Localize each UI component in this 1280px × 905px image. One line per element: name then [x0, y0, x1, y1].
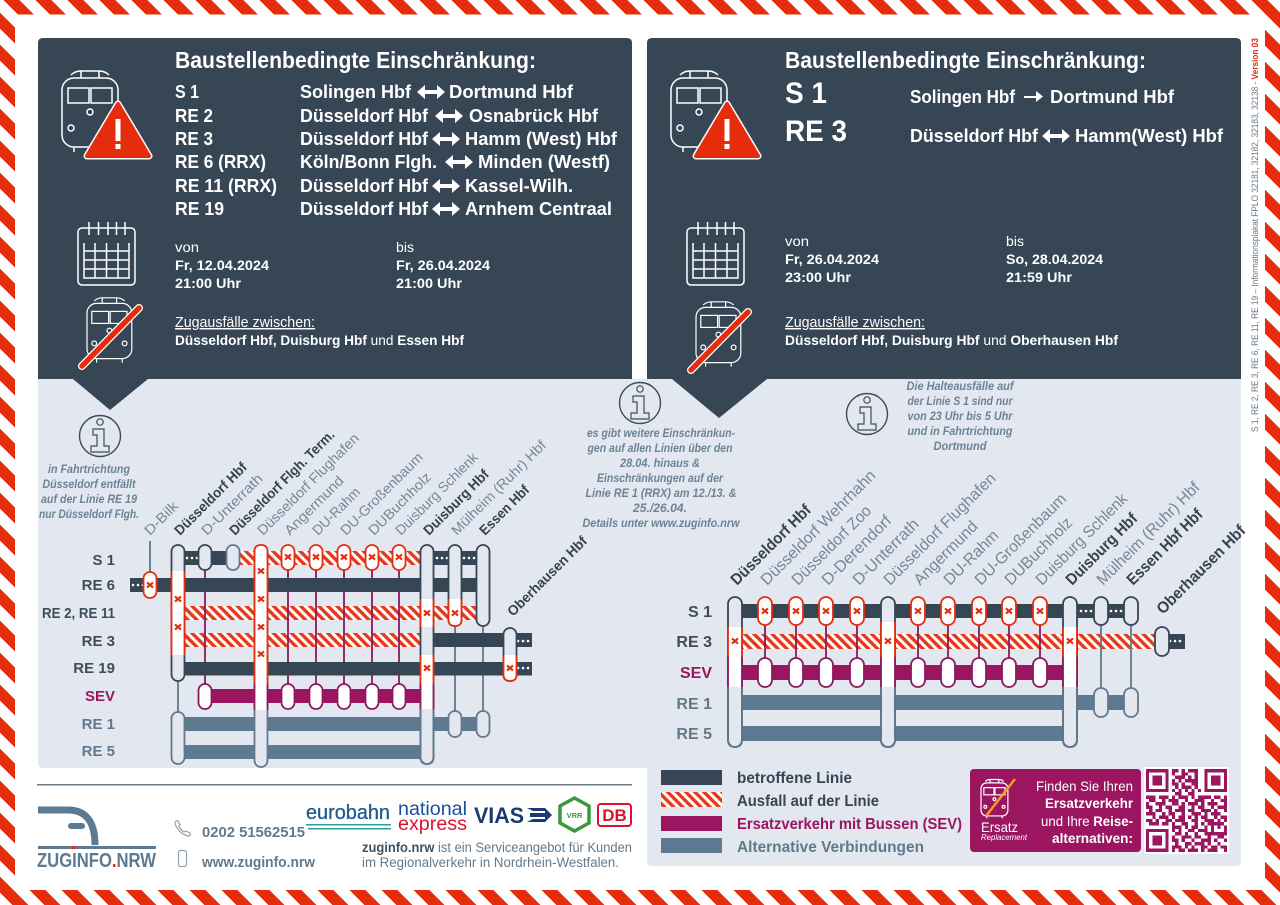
- cancellations: left panel: [175, 315, 464, 348]
- logo: DB: DB: [602, 806, 627, 825]
- row labels: RE 3: [82, 633, 115, 650]
- affected lines table: Düsseldorf Hbf: [300, 199, 429, 219]
- affected lines table: Hamm(West) Hbf: [1075, 126, 1224, 146]
- info note: left: in Fahrtrichtung: [48, 462, 131, 476]
- icon: calendar: [687, 222, 744, 285]
- callout: replacement finder: Replacement: [981, 833, 1028, 842]
- icon: train warning: [62, 71, 149, 156]
- logo: VIAS: VIAS: [474, 803, 524, 828]
- info note: left: auf der Linie RE 19: [41, 492, 137, 506]
- logo: zuginfo.nrw: [37, 810, 156, 872]
- row labels: SEV: [85, 688, 115, 705]
- dates: right panel: So, 28.04.2024: [1006, 251, 1103, 267]
- affected lines table: Solingen Hbf: [910, 87, 1016, 107]
- cancellations: right panel: Zugausfälle zwischen:: [785, 315, 925, 331]
- icon: cancelled train: [691, 302, 748, 370]
- row labels: RE 5: [676, 726, 712, 743]
- dates: right panel: [785, 233, 1103, 285]
- row labels: RE 6: [82, 577, 115, 594]
- info note: middle: es gibt weitere Einschränkun-: [587, 426, 735, 440]
- panel: left dark header: [38, 38, 632, 410]
- station labels: [141, 426, 590, 619]
- dates: left panel: 21:00 Uhr: [396, 275, 463, 291]
- callout: replacement finder: und Ihre Reise-: [1041, 813, 1133, 829]
- legend: [661, 770, 962, 856]
- info note: right: Dortmund: [934, 439, 987, 453]
- affected lines table: Dortmund Hbf: [1050, 87, 1175, 107]
- station labels: D-Unterrath: [198, 470, 266, 538]
- track dots: [1080, 610, 1181, 642]
- affected lines table: RE 2: [175, 106, 213, 126]
- row labels: S 1: [688, 604, 712, 621]
- affected lines table: RE 19: [175, 199, 224, 219]
- icon: cancelled train: [82, 298, 139, 366]
- affected lines table: Arnhem Centraal: [465, 199, 612, 219]
- logo: national express: national: [398, 799, 467, 820]
- station labels: Oberhausen Hbf: [1154, 522, 1250, 618]
- affected lines table: [175, 82, 618, 219]
- cancelled line segments: [184, 551, 478, 647]
- station labels: Düsseldorf Flughafen: [254, 430, 362, 538]
- affected lines table: Osnabrück Hbf: [469, 106, 599, 126]
- footer service note: im Regionalverkehr in Nordrhein-Westfalen.: [362, 855, 619, 870]
- info note: left: nur Düsseldorf Flgh.: [39, 507, 139, 521]
- light background panel: [38, 379, 1241, 866]
- station labels: Düsseldorf Wehrhahn: [758, 467, 879, 589]
- alternative connections bars: [742, 695, 1126, 741]
- dates: right panel: 23:00 Uhr: [785, 269, 852, 285]
- legend: replacement buses: Ersatzverkehr mit Bussen (SEV): [737, 816, 962, 833]
- legend: alternatives: [661, 838, 924, 856]
- footer service note: zuginfo.nrw ist ein Serviceangebot für Kunden: [362, 840, 632, 855]
- station labels: Düsseldorf Hbf: [171, 459, 250, 538]
- logo: DB: [598, 804, 631, 826]
- affected lines table: RE 11 (RRX): [175, 176, 277, 196]
- info note: middle: [582, 382, 740, 530]
- affected lines table: Köln/Bonn Flgh.: [300, 152, 437, 172]
- info note: right: [846, 379, 1014, 453]
- station labels: [728, 467, 1250, 618]
- affected lines table: Düsseldorf Hbf: [300, 106, 429, 126]
- info note: middle: Einschränkungen auf der: [597, 471, 724, 485]
- diagram: right line chart: [676, 467, 1250, 747]
- station pills: [728, 597, 1169, 747]
- cancelled line segment: [742, 634, 1155, 649]
- dates: right panel: Fr, 26.04.2024: [785, 251, 879, 267]
- QR code: [1144, 767, 1229, 854]
- station labels: Duisburg Hbf: [1063, 510, 1142, 589]
- dates: left panel: 21:00 Uhr: [175, 275, 242, 291]
- vertical imprint: S 1, RE 2, RE 3, RE 6, RE 11, RE 19 – Informationsplakat FPLO 32181, 32182, 32183, 32138 - Version 03: [1250, 38, 1260, 432]
- station labels: D-Bilk: [141, 497, 182, 538]
- info note: left: Düsseldorf entfällt: [42, 477, 136, 491]
- logo: eurobahn: eurobahn: [306, 802, 390, 824]
- dates: right panel: 21:59 Uhr: [1006, 269, 1073, 285]
- logo: VIAS: [474, 803, 552, 828]
- callout: replacement finder: alternativen:: [1052, 830, 1133, 846]
- info note: right: Die Halteausfälle auf: [906, 379, 1014, 393]
- pointer: right panel: [672, 379, 767, 418]
- arrow: right direction: [1024, 91, 1043, 102]
- station labels: Angermund: [911, 518, 982, 589]
- row labels: [42, 552, 115, 760]
- contact: website: www.zuginfo.nrw: [201, 855, 316, 871]
- contact: website: [178, 850, 316, 871]
- cancellations: left panel: Zugausfälle zwischen:: [175, 315, 315, 331]
- panel: right dark header: [647, 38, 1241, 418]
- logo: national express: [398, 799, 467, 835]
- station labels: Mülheim (Ruhr) Hbf: [448, 437, 549, 538]
- icon: calendar: [78, 222, 135, 285]
- track dots: [132, 557, 529, 669]
- info note: right: und in Fahrtrichtung: [908, 424, 1013, 438]
- callout: replacement finder: Finden Sie Ihren: [1036, 778, 1133, 794]
- affected lines table: S 1: [785, 77, 827, 110]
- affected lines table: Düsseldorf Hbf: [910, 126, 1039, 146]
- legend: cancellation: Ausfall auf der Linie: [737, 793, 879, 810]
- legend: alternatives: Alternative Verbindungen: [737, 839, 924, 856]
- affected lines table: RE 3: [785, 115, 847, 148]
- station pills: [144, 545, 516, 767]
- station labels: DUBuchholz: [1002, 515, 1076, 589]
- station labels: DU-Rahm: [941, 527, 1002, 589]
- affected lines table: Düsseldorf Hbf: [300, 176, 429, 196]
- row labels: RE 1: [82, 716, 115, 733]
- station labels: Duisburg Schlenk: [1033, 490, 1132, 589]
- station labels: D-Unterrath: [850, 516, 923, 589]
- dates: left panel: Fr, 26.04.2024: [396, 257, 490, 273]
- station labels: DU-Großenbaum: [972, 491, 1070, 589]
- row labels: [676, 604, 712, 743]
- dates: left panel: von: [175, 239, 199, 255]
- station labels: Essen Hbf Hbf: [1124, 506, 1207, 589]
- diagram: left line chart: [42, 426, 590, 767]
- logo: VRR: VRR: [567, 811, 583, 820]
- cancellations: left panel: Düsseldorf Hbf, Duisburg Hbf und Essen Hbf: [175, 332, 464, 348]
- row labels: SEV: [680, 665, 712, 682]
- affected lines table: S 1: [175, 82, 199, 102]
- callout: replacement finder: Ersatzverkehr: [1045, 795, 1134, 811]
- callout: replacement finder: Ersatz: [981, 819, 1018, 835]
- legend: cancellation: [661, 792, 879, 810]
- affected lines table: Dortmund Hbf: [449, 82, 574, 102]
- contact: phone: 0202 51562515: [202, 825, 305, 841]
- info note: middle: gen auf allen Linien über den: [587, 441, 732, 455]
- station labels: Mülheim (Ruhr) Hbf: [1094, 479, 1204, 589]
- dates: right panel: bis: [1006, 233, 1024, 249]
- logo: national express: express: [398, 814, 467, 835]
- station labels: D-Derendorf: [819, 512, 896, 589]
- info note: middle: 28.04. hinaus &: [619, 456, 700, 470]
- affected line bars: [130, 551, 532, 676]
- heading: right panel: Baustellenbedingte Einschränkung:: [785, 47, 1146, 73]
- info note: middle: Details unter www.zuginfo.nrw: [582, 516, 740, 530]
- row labels: RE 1: [676, 696, 712, 713]
- icon: train warning: [671, 71, 758, 156]
- station labels: Düsseldorf Zoo: [789, 502, 875, 589]
- affected lines table: Düsseldorf Hbf: [300, 129, 429, 149]
- callout: replacement finder: [970, 769, 1141, 852]
- affected lines table: Hamm (West) Hbf: [465, 129, 618, 149]
- affected lines table: Kassel-Wilh.: [465, 176, 573, 196]
- info note: right: von 23 Uhr bis 5 Uhr: [908, 409, 1014, 423]
- footer divider: [37, 784, 632, 786]
- dates: left panel: bis: [396, 239, 414, 255]
- cancellations: right panel: [785, 315, 1118, 348]
- logo: zuginfo.nrw: ZUGINFO.NRW: [37, 850, 156, 872]
- contact: phone: [175, 821, 305, 841]
- station labels: Düsseldorf Flgh. Term.: [226, 426, 338, 538]
- station labels: DU-Rahm: [309, 484, 363, 538]
- row labels: S 1: [92, 552, 115, 569]
- info note: middle: 25./26.04.: [632, 501, 687, 515]
- logo: VRR: [560, 798, 589, 831]
- info note: left: [39, 416, 139, 521]
- dates: left panel: [175, 239, 490, 291]
- cancellations: right panel: Düsseldorf Hbf, Duisburg Hbf und Oberhausen Hbf: [785, 332, 1118, 348]
- replacement bus bar: [742, 665, 1064, 680]
- row labels: RE 5: [82, 743, 115, 760]
- row labels: RE 2, RE 11: [42, 605, 115, 622]
- station labels: Oberhausen Hbf: [504, 533, 590, 619]
- affected lines table: Solingen Hbf: [300, 82, 412, 102]
- station labels: DU-Großenbaum: [337, 449, 426, 538]
- dates: left panel: Fr, 12.04.2024: [175, 257, 269, 273]
- alternative connections bars: [184, 717, 479, 759]
- row labels: RE 3: [676, 634, 712, 651]
- dates: right panel: von: [785, 233, 809, 249]
- affected lines table: RE 3: [175, 129, 213, 149]
- legend: affected line: [661, 770, 852, 787]
- station labels: Angermund: [281, 472, 347, 538]
- info note: right: der Linie S 1 sind nur: [908, 394, 1014, 408]
- info note: middle: Linie RE 1 (RRX) am 12./13. &: [586, 486, 736, 500]
- connector lines: [150, 541, 483, 712]
- station labels: DUBuchholz: [365, 469, 434, 538]
- connector lines: [765, 625, 1131, 688]
- row labels: RE 19: [73, 660, 115, 677]
- heading: left panel: Baustellenbedingte Einschränkung:: [175, 47, 536, 73]
- station labels: Essen Hbf: [476, 481, 533, 538]
- affected lines table: Minden (Westf): [478, 152, 610, 172]
- replacement bus bar: [205, 689, 423, 703]
- station labels: Duisburg Hbf: [420, 466, 492, 538]
- pointer: left panel: [73, 379, 148, 410]
- icon: replacement train: [981, 779, 1015, 818]
- station labels: Duisburg Schlenk: [392, 448, 482, 538]
- station labels: Düsseldorf Flughafen: [881, 470, 1000, 589]
- affected line bars: [742, 604, 1185, 649]
- legend: affected line: betroffene Linie: [737, 770, 852, 787]
- affected lines table: [785, 77, 1224, 148]
- footer service note: [362, 840, 632, 870]
- affected lines table: RE 6 (RRX): [175, 152, 266, 172]
- station labels: Düsseldorf Hbf: [728, 501, 815, 589]
